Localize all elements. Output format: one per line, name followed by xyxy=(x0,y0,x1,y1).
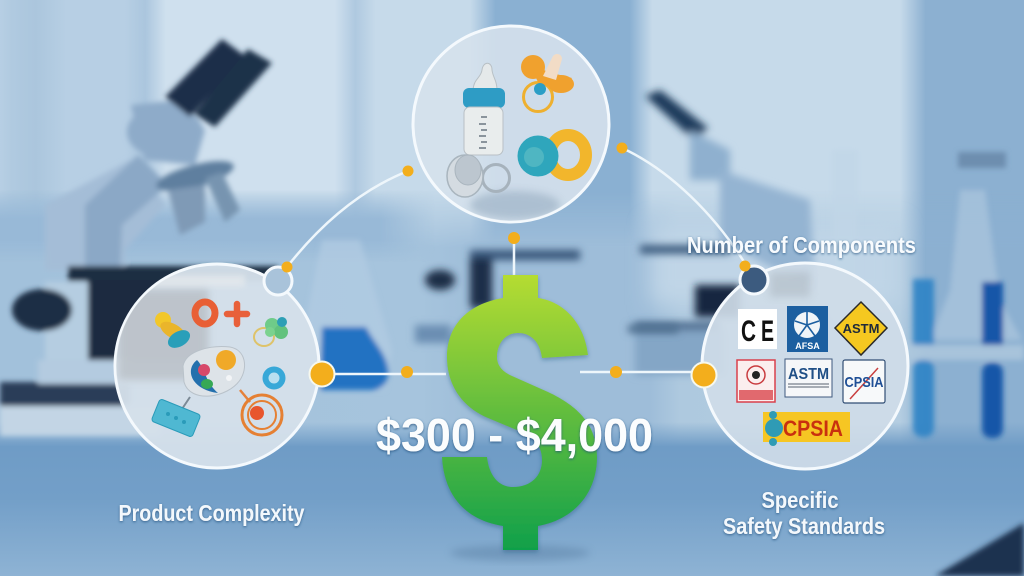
icon: central toy xyxy=(183,347,245,396)
icon: blue keypad xyxy=(151,397,201,437)
icon: red certification mark xyxy=(737,360,775,402)
icon: green teether xyxy=(254,317,288,346)
icon: ASTM rectangle: ASTM xyxy=(788,366,829,383)
icon: ASTM rectangle xyxy=(785,359,832,397)
icon: CPSIA yellow badge: CPSIA xyxy=(783,416,843,441)
node rings xyxy=(264,266,768,295)
icon: baby bottle xyxy=(463,63,505,155)
panel: product complexity circle xyxy=(115,264,319,468)
connector arcs and lines xyxy=(287,148,746,374)
blurred flask left xyxy=(300,240,392,390)
icon: plus sign xyxy=(227,304,247,324)
icon: teal pacifier with yellow ring xyxy=(518,135,586,176)
icon: blue gear xyxy=(266,370,282,386)
blurred microscope left xyxy=(0,39,278,436)
panel: safety standards circle xyxy=(702,263,908,469)
icon: CPSIA arrows badge: CPSIA xyxy=(844,374,884,391)
label: specific safety standards: Safety Standards xyxy=(723,513,885,539)
icon: ASTM diamond xyxy=(835,302,887,355)
icon: grey pacifier xyxy=(447,155,510,197)
icon: AFSA badge xyxy=(787,306,828,352)
icon: green dollar sign xyxy=(442,275,597,550)
icon: CE mark: E xyxy=(761,315,774,348)
label: specific safety standards xyxy=(723,487,885,539)
blurred centre lab items xyxy=(415,250,678,343)
label: number of components: Number of Components xyxy=(687,232,916,258)
connector dots xyxy=(282,142,750,388)
icon: yellow rattle xyxy=(155,312,193,351)
icon: AFSA badge: AFSA xyxy=(795,341,820,351)
icon: ASTM diamond: ASTM xyxy=(843,321,879,336)
label: specific safety standards: Specific xyxy=(762,487,839,513)
icon: orange target xyxy=(240,390,282,435)
icon: orange ring xyxy=(195,302,215,324)
icon: CPSIA yellow badge xyxy=(763,411,850,446)
icon: CE mark: C xyxy=(741,315,756,348)
icon: CE mark xyxy=(738,309,777,349)
label: product complexity: Product Complexity xyxy=(118,500,305,526)
icon: CPSIA arrows badge xyxy=(843,360,885,403)
panel: baby products circle xyxy=(413,26,609,222)
blurred test tubes right xyxy=(832,150,1024,438)
icon: orange pacifier xyxy=(521,54,574,112)
price range: $300 - $4,000 xyxy=(376,409,653,461)
blurred microscope right xyxy=(635,90,815,375)
